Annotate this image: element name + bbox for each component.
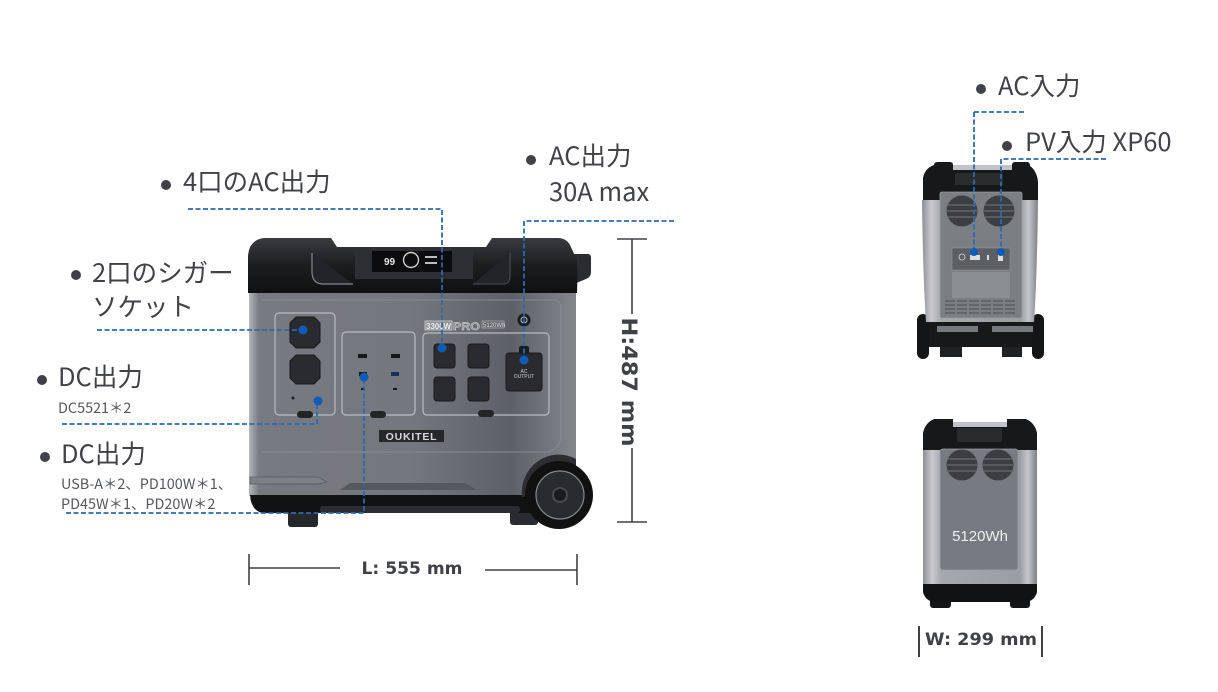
rear wheels [917,314,929,359]
power button [518,314,530,326]
side view unit [923,419,1037,608]
label: AC output 30A: 30A max [549,172,649,209]
dimension: length [249,554,577,585]
label: AC output 30A [526,136,649,209]
rear fans [946,196,1014,226]
label: cigar sockets [71,253,234,324]
panel: USB DC outputs [342,332,415,418]
side vent stripes [250,477,327,484]
rear body [922,200,1038,322]
panel: AC outputs: OUTPUT [514,374,534,380]
label: cigar sockets: 2口のシガー [92,253,234,290]
label: 4-port AC output: 4口のAC出力 [183,162,331,199]
dimension: height: H:487 mm [617,318,641,446]
display: 99 [384,257,396,268]
capacity label: 5120Wh [952,528,1008,545]
side feet [930,598,951,608]
handle recess right [473,253,510,284]
feet [288,510,538,527]
wheel [522,455,593,529]
rear top shell [923,162,1038,200]
panel: AC outputs: AC [521,369,528,375]
label: DC output USB: PD45W＊1、PD20W＊2 [61,493,215,514]
dimension: length: L: 555 mm [362,559,462,579]
rear port panel [952,248,1010,270]
leader lines rear view [970,112,1106,256]
side handle [574,254,591,284]
handle recess left [312,253,353,284]
leader lines front view [62,209,674,513]
label: DC output USB: DC出力 [61,434,146,471]
label: AC input: AC入力 [998,66,1080,103]
side fans [946,450,1014,480]
rear view unit [917,162,1044,359]
label: AC output 30A: AC出力 [549,136,632,173]
rear vents [945,301,1016,313]
3300W PRO badge [425,321,505,333]
label: DC output USB [40,434,232,514]
label: DC output DC5521 [37,357,143,418]
3300W PRO badge: PRO [453,321,480,333]
panel: AC outputs [423,333,549,417]
3300W PRO badge: 5120Wh [483,323,505,329]
display [355,247,473,279]
top black shell [248,238,577,293]
panel: cigar sockets [275,313,335,418]
brand plate: OUKITEL [386,431,437,443]
main unit front view [248,238,593,529]
black base [250,495,540,513]
label: cigar sockets: ソケット [92,287,194,324]
label: PV input: PV入力 XP60 [1025,122,1172,159]
dimension: height [617,239,647,522]
label: DC output DC5521: DC出力 [58,357,143,394]
3300W PRO badge: 3300W [426,321,452,331]
gray body [249,293,576,496]
dimension: width [919,626,1042,657]
dimension: width: W: 299 mm [925,630,1037,650]
label: DC output USB: USB-A＊2、PD100W＊1、 [61,473,232,494]
label: DC output DC5521: DC5521＊2 [58,397,131,418]
